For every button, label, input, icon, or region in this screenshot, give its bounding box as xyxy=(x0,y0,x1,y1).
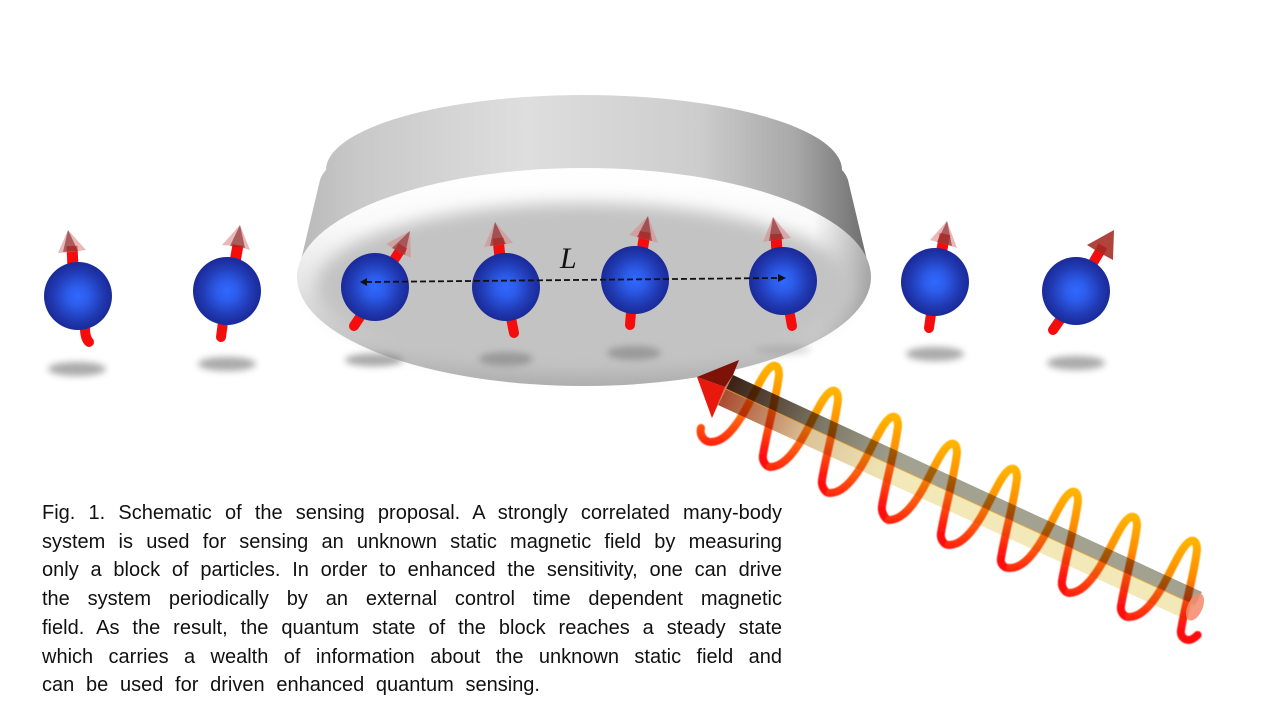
particle 3 xyxy=(341,231,411,326)
caption text block: field. As the result, the quantum state of the block reaches a steady state xyxy=(42,617,782,639)
particle 7 xyxy=(901,221,969,328)
particle 5 xyxy=(601,216,669,325)
particle 2 xyxy=(193,225,261,337)
caption text block xyxy=(42,502,782,696)
disk side wall xyxy=(297,95,871,277)
particle 1 xyxy=(44,230,112,342)
disk right edge shade xyxy=(297,168,871,386)
disk block xyxy=(297,95,871,386)
caption text block: Fig. 1. Schematic of the sensing proposal. A strongly correlated many-body xyxy=(42,502,782,524)
particle 6 xyxy=(749,217,817,326)
caption text block: only a block of particles. In order to enhanced the sensitivity, one can drive xyxy=(42,559,782,581)
caption text block: can be used for driven enhanced quantum sensing. xyxy=(42,674,540,696)
rod xyxy=(718,375,1202,620)
disk inner recess xyxy=(316,203,852,371)
dashed double arrow: block length xyxy=(360,274,786,286)
particle shadows xyxy=(48,345,1105,376)
caption text block: system is used for sensing an unknown static magnetic field by measuring xyxy=(42,531,782,553)
particle 8 xyxy=(1042,230,1114,330)
driving field: coil, rod and arrowhead xyxy=(697,360,1208,640)
label L: L xyxy=(559,242,577,275)
arrowhead xyxy=(697,360,739,418)
caption text block: the system periodically by an external control time dependent magnetic xyxy=(42,588,782,610)
wave coil xyxy=(701,366,1198,640)
disk front face xyxy=(297,168,871,386)
caption text block: which carries a wealth of information about the unknown static field and xyxy=(42,646,782,668)
particle 4 xyxy=(472,222,540,333)
rod end cap xyxy=(1182,591,1208,623)
